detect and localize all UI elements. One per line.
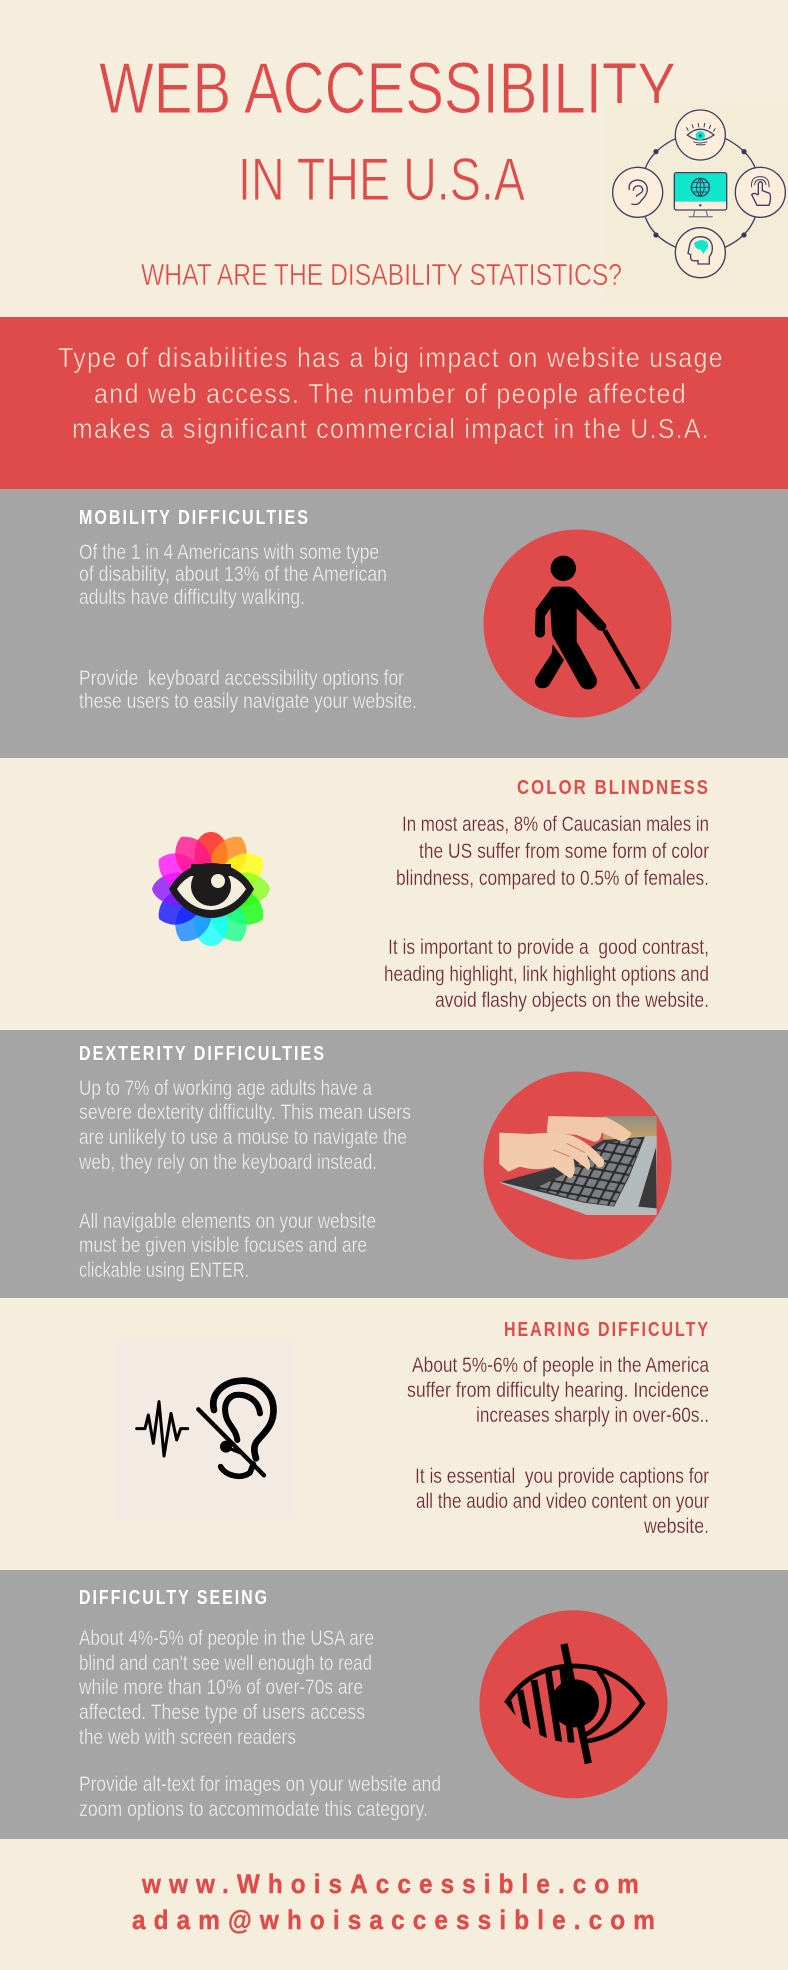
heading: color blindness: COLOR BLINDNESS <box>517 777 710 799</box>
panel: mobility difficulties <box>0 489 788 758</box>
heading: mobility: MOBILITY DIFFICULTIES <box>79 507 310 529</box>
text: dexterity statistic: Up to 7% of working age adults have a <box>79 1077 372 1100</box>
text: mobility advice: Provide keyboard accessibility options for <box>79 667 404 690</box>
text: seeing statistic: affected. These type of users access <box>79 1701 365 1724</box>
text: dexterity statistic: are unlikely to use a mouse to navigate the <box>79 1126 407 1149</box>
website address: www.WhoisAccessible.com <box>141 1869 647 1899</box>
panel: dexterity difficulties <box>0 1030 788 1298</box>
text: color blindness statistic <box>396 813 709 890</box>
title block <box>99 49 676 213</box>
text: dexterity statistic: severe dexterity difficulty. This mean users <box>79 1101 411 1124</box>
text: hearing advice: website. <box>643 1515 709 1538</box>
icon: touch hand circle <box>735 167 785 217</box>
text: seeing statistic <box>78 1627 374 1749</box>
text: hearing advice <box>415 1465 709 1538</box>
icon: rainbow eye <box>151 829 271 949</box>
icon: head circle <box>675 228 725 278</box>
text: dexterity advice: clickable using ENTER. <box>79 1259 249 1282</box>
icon: low-vision eye <box>480 1610 668 1798</box>
heading: hearing: HEARING DIFFICULTY <box>504 1319 710 1341</box>
icon: hands typing on keyboard <box>484 1072 672 1260</box>
icon: person with cane <box>484 530 672 718</box>
panel: difficulty seeing <box>0 1570 788 1839</box>
text: color blindness statistic: In most areas, 8% of Caucasian males in <box>402 813 709 836</box>
panel: color blindness <box>0 758 788 1030</box>
panel: hearing difficulty <box>0 1298 788 1570</box>
text: hearing statistic: About 5%-6% of people in the America <box>412 1354 709 1377</box>
text: color blindness advice: heading highlight, link highlight options and <box>384 963 709 986</box>
email address: adam@whoisaccessible.com <box>132 1905 663 1935</box>
footer: contact links <box>132 1869 663 1935</box>
intro text: Type of disabilities has a big impact on website usage <box>58 342 724 373</box>
text: hearing statistic: suffer from difficulty hearing. Incidence <box>407 1379 709 1402</box>
text: seeing advice: Provide alt-text for images on your website and <box>79 1773 441 1796</box>
connector ring <box>645 138 756 247</box>
icon panel: accessibility diagram <box>607 103 788 302</box>
text: color blindness advice: avoid flashy objects on the website. <box>435 989 709 1012</box>
text: mobility advice <box>79 667 417 713</box>
icon: ear circle <box>613 167 663 217</box>
text: mobility statistic: of disability, about 13% of the American <box>79 563 387 586</box>
text: seeing statistic: the web with screen readers <box>79 1726 296 1749</box>
title line: in the usa: IN THE U.S.A <box>238 146 525 213</box>
text: hearing advice: It is essential you provide captions for <box>415 1465 709 1488</box>
text: seeing advice <box>79 1773 441 1821</box>
panel: intro band <box>0 317 788 489</box>
intro text: makes a significant commercial impact in the U.S.A. <box>72 413 710 444</box>
intro text <box>58 342 724 444</box>
heading: dexterity: DEXTERITY DIFFICULTIES <box>79 1043 326 1065</box>
text: mobility statistic <box>79 541 387 609</box>
text: hearing statistic <box>407 1354 709 1427</box>
text: color blindness advice <box>384 936 709 1012</box>
text: seeing advice: zoom options to accommodate this category. <box>79 1798 428 1821</box>
text: dexterity advice <box>79 1210 376 1282</box>
icon: crossed-out ear with sound wave <box>115 1339 295 1519</box>
text: mobility statistic: adults have difficulty walking. <box>79 586 305 609</box>
text: dexterity advice: All navigable elements on your website <box>79 1210 376 1233</box>
text: seeing statistic: while more than 10% of over-70s are <box>78 1676 363 1699</box>
text: color blindness statistic: the US suffer from some form of color <box>419 840 709 863</box>
text: hearing statistic: increases sharply in over-60s.. <box>476 1404 709 1427</box>
text: dexterity advice: must be given visible focuses and are <box>79 1234 367 1257</box>
text: seeing statistic: About 4%-5% of people in the USA are <box>79 1627 374 1650</box>
text: dexterity statistic <box>78 1077 411 1174</box>
intro text: and web access. The number of people affected <box>94 378 687 409</box>
subtitle: WHAT ARE THE DISABILITY STATISTICS? <box>141 257 622 292</box>
icon: eye circle <box>675 110 725 160</box>
icon: monitor with globe <box>674 173 727 217</box>
text: dexterity statistic: web, they rely on the keyboard instead. <box>78 1151 377 1174</box>
text: seeing statistic: blind and can't see well enough to read <box>79 1652 372 1675</box>
text: color blindness advice: It is important to provide a good contrast, <box>388 936 709 959</box>
text: mobility advice: these users to easily navigate your website. <box>79 690 417 713</box>
heading: seeing: DIFFICULTY SEEING <box>79 1587 269 1609</box>
text: hearing advice: all the audio and video content on your <box>416 1490 709 1513</box>
text: color blindness statistic: blindness, compared to 0.5% of females. <box>396 867 709 890</box>
text: mobility statistic: Of the 1 in 4 Americans with some type <box>79 541 379 564</box>
